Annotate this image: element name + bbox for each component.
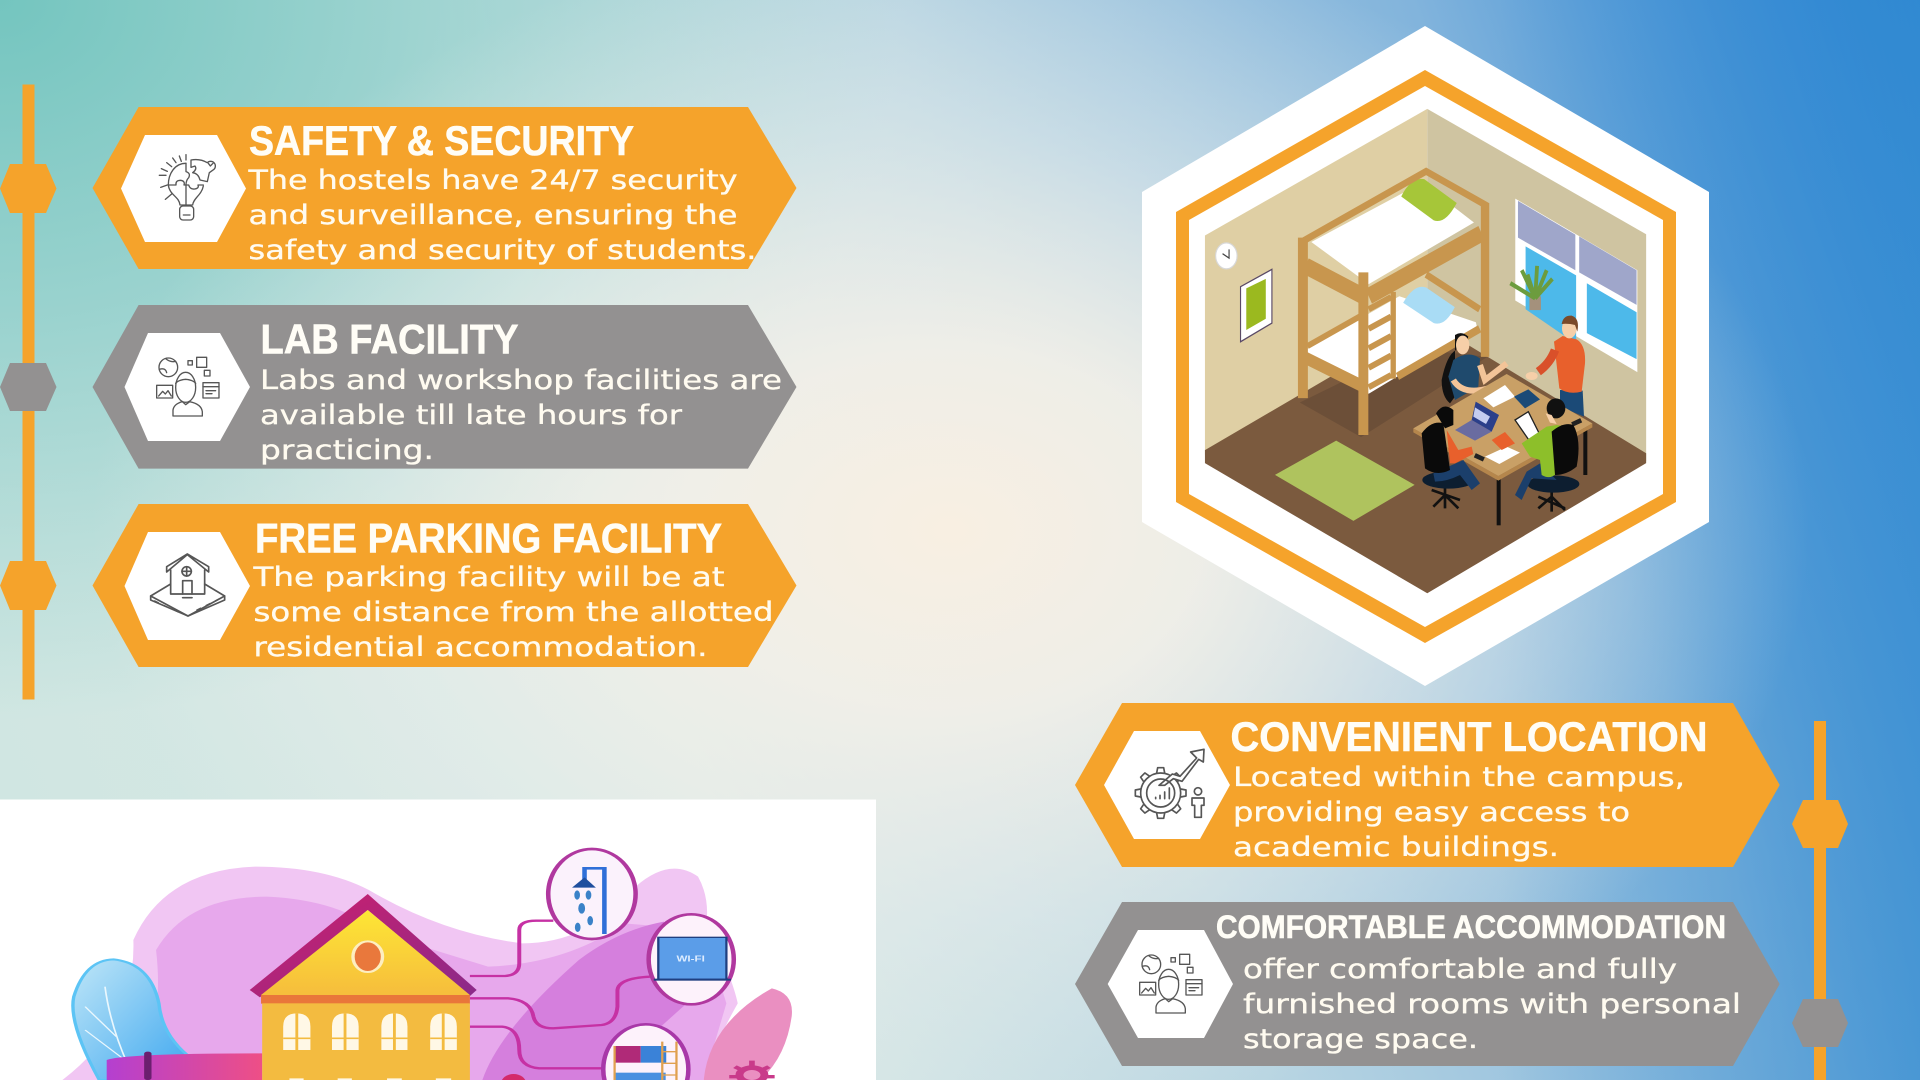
students around table bbox=[1413, 316, 1592, 525]
icon: person with ideas bbox=[157, 357, 219, 416]
icon: house on plot bbox=[151, 554, 225, 616]
window bbox=[1510, 199, 1637, 372]
icon: gear with growth arrow bbox=[1135, 749, 1204, 818]
heading: CONVENIENT LOCATION bbox=[1230, 713, 1708, 760]
background blobs bbox=[62, 867, 792, 1080]
icon circle: wi-fi laptop bbox=[649, 914, 734, 1004]
rug bbox=[1275, 441, 1415, 521]
text block: The parking facility will be at bbox=[252, 562, 725, 593]
red shape bbox=[501, 1074, 526, 1080]
heading: LAB FACILITY bbox=[260, 316, 518, 362]
panel: lab facility bbox=[92, 305, 796, 469]
connector lines bbox=[470, 921, 650, 1068]
text block: furnished rooms with personal bbox=[1243, 989, 1741, 1020]
text block: practicing. bbox=[260, 435, 434, 466]
purple wall bbox=[107, 1052, 262, 1080]
panel: free parking facility bbox=[92, 504, 796, 667]
icon: light bulb puzzle bbox=[159, 155, 215, 220]
panel: illustration of hostel amenities bbox=[0, 800, 876, 1080]
icon circle: wi-fi laptop: WI-FI bbox=[676, 955, 705, 964]
room illustration bbox=[1205, 109, 1646, 593]
text block bbox=[247, 165, 757, 266]
text block: storage space. bbox=[1243, 1024, 1478, 1055]
panel: comfortable accommodation bbox=[1075, 902, 1780, 1066]
table bbox=[1413, 374, 1592, 525]
text block: available till late hours for bbox=[260, 400, 683, 431]
panel: convenient location bbox=[1075, 703, 1780, 867]
left timeline bbox=[0, 84, 56, 700]
panel: safety and security bbox=[92, 107, 796, 269]
wall clock bbox=[1216, 243, 1237, 269]
text block: some distance from the allotted bbox=[254, 597, 774, 628]
house bbox=[250, 894, 477, 1080]
text block bbox=[260, 365, 782, 466]
heading: COMFORTABLE ACCOMMODATION bbox=[1216, 909, 1726, 945]
seated student front right bbox=[1515, 398, 1579, 512]
gear icon bbox=[729, 1061, 775, 1080]
text block: The hostels have 24/7 security bbox=[247, 165, 738, 196]
heading: FREE PARKING FACILITY bbox=[255, 514, 722, 562]
right timeline bbox=[1792, 721, 1848, 1080]
heading: SAFETY & SECURITY bbox=[249, 117, 634, 164]
icon circle: bunk bed bbox=[603, 1024, 688, 1080]
text block: Labs and workshop facilities are bbox=[260, 365, 782, 396]
text block: residential accommodation. bbox=[254, 632, 708, 663]
seated student blue shirt bbox=[1442, 333, 1507, 403]
seated student front left bbox=[1422, 407, 1480, 508]
text block: providing easy access to bbox=[1233, 797, 1630, 828]
text block bbox=[252, 562, 774, 663]
bunk bed bbox=[1303, 171, 1487, 435]
text block: offer comfortable and fully bbox=[1243, 954, 1677, 985]
text block bbox=[1243, 954, 1741, 1055]
text block: academic buildings. bbox=[1233, 832, 1559, 863]
standing student bbox=[1526, 316, 1585, 417]
text block: and surveillance, ensuring the bbox=[248, 200, 738, 231]
blue leaf bbox=[73, 959, 187, 1080]
text block: Located within the campus, bbox=[1233, 762, 1685, 793]
icon: person with ideas bbox=[1140, 954, 1202, 1013]
text block: safety and security of students. bbox=[248, 235, 756, 266]
picture frame bbox=[1241, 269, 1272, 342]
icon circle: shower bbox=[548, 849, 636, 939]
hexagon frame with dorm room illustration bbox=[1142, 26, 1709, 686]
text block bbox=[1233, 762, 1685, 863]
